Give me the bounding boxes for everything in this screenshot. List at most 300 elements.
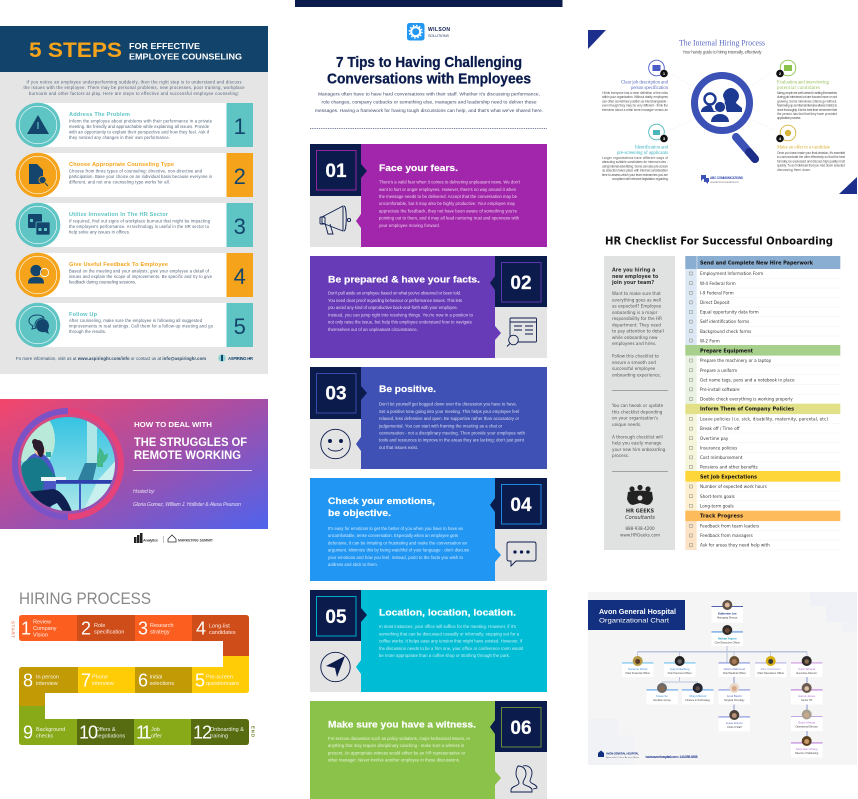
step labels: Pre-screen bbox=[206, 674, 233, 680]
node: COO bbox=[755, 656, 786, 677]
node: CMO bbox=[718, 656, 750, 677]
header banner: FOR EFFECTIVE bbox=[129, 41, 200, 51]
section: paperwork: W-2 Form bbox=[700, 338, 720, 343]
step labels: candidates bbox=[209, 630, 236, 636]
section: equipment: Prepare the machinery or a laptop bbox=[700, 358, 771, 363]
title box: Avon General Hospital bbox=[599, 609, 676, 616]
tip 01: There's a valid fear when it comes to delivering unpleasant news. We don't bbox=[379, 180, 521, 184]
section 4: make an offer: quickly. To an individual that you had down selected bbox=[777, 164, 845, 168]
node: chief of staff: Jesse Franco bbox=[726, 721, 743, 725]
node: chief services: Chief Services Officer bbox=[668, 672, 692, 675]
step labels: Company bbox=[33, 626, 57, 632]
step labels: questionnaire bbox=[206, 681, 239, 687]
step numbers: 9 bbox=[23, 722, 33, 742]
step numbers: 11 bbox=[136, 722, 152, 742]
section: job expectations: Set Job Expectations bbox=[700, 474, 757, 480]
footer: www.avonhospital.com • 143-555-5458 bbox=[644, 755, 698, 759]
tip 04: be objective. bbox=[328, 508, 391, 519]
tip 05: 05 bbox=[325, 607, 347, 628]
section 2: evaluation: Narrowing up an internal interview allows metrics to bbox=[777, 104, 837, 108]
section: policies: Break off / Time off bbox=[700, 426, 740, 431]
intro text: If you notice an employee underperforming suddenly, then the right step is to understand and discuss bbox=[27, 80, 241, 84]
sidebar: everything goes as well bbox=[612, 297, 661, 302]
tip 06: 06 bbox=[510, 718, 532, 739]
icon: document with magnifier bbox=[507, 318, 536, 346]
node: senior VP: Hanna James bbox=[798, 694, 816, 698]
section 2: evaluation: growing. Some interviews criteria go without. bbox=[777, 99, 837, 103]
node: managing director bbox=[712, 600, 743, 622]
sidebar: HR GEEKS bbox=[626, 509, 654, 515]
sidebar: department. They need bbox=[612, 322, 661, 327]
title box bbox=[588, 600, 685, 630]
node: decision group bbox=[646, 683, 678, 704]
sidebar: on your organization's bbox=[612, 416, 658, 421]
section: track progress: Ask for areas they need help with bbox=[700, 543, 770, 548]
section: track progress: Feedback from managers bbox=[700, 533, 753, 538]
section 2: evaluation: potential candidates bbox=[777, 86, 820, 91]
node: director of marketing bbox=[791, 736, 822, 758]
sidebar: successful employee bbox=[612, 366, 656, 371]
step labels: Onboarding & bbox=[210, 727, 244, 733]
tip 04: your emotions and how you feel. Instead, point to the facts you wish to bbox=[328, 555, 464, 560]
section 3: identification: Identification and bbox=[635, 146, 669, 150]
node: operational director bbox=[791, 710, 822, 731]
section: paperwork: Send and Complete New Hire Paperwork bbox=[700, 261, 814, 267]
header banner: EMPLOYEE COUNSELING bbox=[129, 52, 242, 62]
header banner bbox=[0, 26, 268, 72]
section 3: identification: pre-screening of applicants bbox=[617, 151, 668, 156]
footer: Specialist Care Across Avon bbox=[606, 756, 640, 759]
header banner: 5 STEPS bbox=[29, 39, 122, 62]
sidebar: onboarding experience. bbox=[612, 372, 661, 378]
step labels: Review bbox=[33, 620, 51, 626]
tip 06: present. An appropriate witness would either be an HR representative or bbox=[328, 750, 466, 755]
node: chief of staff: Chief of Staff bbox=[727, 726, 742, 729]
tip 04 bbox=[310, 478, 547, 581]
step numbers: 6 bbox=[138, 670, 148, 690]
section: equipment: Double check everything is working properly bbox=[700, 397, 793, 402]
step 2: different, and not one counseling type works for all. bbox=[69, 180, 170, 184]
sidebar: Want to make sure that bbox=[612, 291, 661, 296]
step 2: Choose Appropriate Counseling Type bbox=[69, 162, 174, 168]
section: track progress: Feedback from team leaders bbox=[700, 524, 759, 528]
tip 01: appreciate the feedback, they not have been aware of something you're bbox=[379, 208, 518, 213]
node: managing director: Managing Director bbox=[717, 616, 738, 620]
step labels: Offers & bbox=[96, 727, 116, 733]
section 2: evaluation: the person has lied that they have provided bbox=[777, 112, 837, 116]
sidebar: your new hire onboarding bbox=[612, 447, 666, 452]
section 1: job description: interview about a retail store manager versus an bbox=[602, 108, 668, 112]
section 4: make an offer: discussing them down. bbox=[777, 168, 811, 172]
footer contact line: Fo more information, visit us at www.aspiringhr.com/info or contact us at info@aspiringhr.com bbox=[16, 356, 206, 361]
checklist table bbox=[685, 256, 840, 550]
step numbers: 4 bbox=[196, 618, 206, 638]
tip 05: Location, location, location. bbox=[379, 608, 516, 618]
panel: hiring process bbox=[10, 589, 256, 745]
step labels: Role bbox=[94, 623, 105, 629]
node: CFO: Chief Financial Officer bbox=[625, 672, 650, 675]
section 3: identification: compliant with relevant legislation regarding bbox=[612, 177, 668, 181]
tip 03: conversation - not a disciplinary meeting. Then provide your employee with bbox=[379, 430, 526, 436]
tip 02: not only raise the issue, but help this employee understand how to navigate bbox=[328, 320, 473, 324]
intro bbox=[315, 92, 543, 114]
sidebar: www.HRGeeks.com bbox=[620, 532, 660, 537]
tip 03 bbox=[310, 367, 547, 469]
step 5: through the results. bbox=[69, 329, 106, 334]
panel: 5 steps for effective employee counseling bbox=[0, 26, 268, 374]
sidebar: while onboarding new bbox=[612, 335, 658, 340]
node: decision group: Kwasi So bbox=[656, 694, 668, 698]
sidebar: process. bbox=[612, 453, 629, 458]
section 1: job description: I think everyone has a clear definition of the roles bbox=[602, 91, 668, 95]
step 3: help solve any issues in offices. bbox=[69, 230, 130, 234]
node: executive director: Executive Director bbox=[797, 672, 817, 675]
footer logo bbox=[701, 175, 743, 184]
step 5: improvements in real settings. Call them for a follow-up meeting and go bbox=[69, 324, 214, 328]
node: CEO bbox=[712, 625, 743, 646]
tip 06: Make sure you have a witness. bbox=[328, 720, 476, 730]
footer contact line bbox=[16, 354, 253, 362]
sidebar: Are you hiring a bbox=[612, 268, 655, 274]
sidebar: Consultants bbox=[625, 515, 655, 521]
tip 02: you avoid any kind of unproductive back-and-forth with your employee. bbox=[328, 305, 458, 310]
node: chief services bbox=[664, 656, 696, 677]
node: CEO: Chief Executive Officer bbox=[715, 642, 740, 644]
tip 04: uncomfortable, tense conversation. Especially when an employee gets bbox=[328, 533, 458, 538]
step 4 bbox=[16, 253, 253, 297]
step 5: 5 bbox=[234, 314, 246, 339]
step 4: Give Useful Feedback To Employee bbox=[69, 262, 168, 268]
sidebar: responsibility for the HR bbox=[612, 316, 662, 321]
tip 02: Don't pull aside an employee based on what you've observed or been told. bbox=[328, 290, 461, 296]
step numbers: 1 bbox=[21, 618, 31, 638]
tip 05: the discussion needs to be a firm one, your office or conference room would bbox=[379, 646, 524, 651]
step 5 bbox=[16, 303, 253, 347]
section 4: make an offer bbox=[776, 125, 845, 172]
tip 06: For serious discussion such as policy violations, major behavioral issues, or bbox=[328, 736, 471, 741]
heading: THE STRUGGLES OF bbox=[134, 437, 247, 449]
section: policies: Pensions and other benefits bbox=[700, 464, 758, 470]
tip 01 bbox=[310, 144, 547, 247]
icon: megaphone bbox=[320, 206, 351, 234]
section 3: identification bbox=[602, 124, 669, 181]
step 2: 2 bbox=[234, 164, 246, 189]
step 1: they noticed any changes in their own performance. bbox=[69, 135, 170, 140]
step 1: Address The Problem bbox=[69, 112, 130, 118]
footer: AVON GENERAL HOSPITAL bbox=[606, 752, 639, 756]
icon: smiley bbox=[321, 429, 350, 459]
process path bbox=[19, 615, 249, 745]
sidebar: Follow this checklist to bbox=[612, 354, 659, 359]
sidebar: to pay attention to detail bbox=[612, 329, 664, 334]
section: equipment: Prepare a uniform bbox=[700, 368, 737, 373]
step 4: Based on the meeting and your analysis, give your employee a detail of bbox=[69, 268, 210, 274]
node: COO: Chief Operations Officer bbox=[757, 672, 784, 675]
section 1: job description: can often sometimes position as interchangeable - bbox=[602, 99, 668, 103]
node: senior VP: Senior VP bbox=[801, 699, 813, 702]
node: CFO: Suzanne Weiss bbox=[628, 667, 648, 671]
node: finance and technology bbox=[682, 683, 714, 704]
section 2: evaluation bbox=[776, 60, 837, 120]
section 4: make an offer: to communicate the offer effectively so that the best bbox=[777, 155, 845, 159]
section 2: evaluation: application process. bbox=[777, 116, 801, 120]
tip 01: uncomfortable, but it may also be highly productive. Your employee may bbox=[379, 201, 516, 206]
sidebar: join your team? bbox=[611, 280, 654, 286]
section 3: identification: as selection takes place with internal consideration bbox=[602, 169, 668, 173]
sidebar: You can tweak or update bbox=[611, 403, 664, 408]
title: 7 Tips to Having Challenging bbox=[336, 54, 522, 71]
step labels: Long-list bbox=[209, 624, 230, 630]
step 1: 1 bbox=[234, 114, 246, 139]
sidebar: A thorough checklist will bbox=[612, 434, 663, 439]
sponsor logos: Analytics bbox=[143, 538, 158, 542]
section 1: job description: Clear job description and bbox=[621, 80, 669, 86]
section 1: job description: person specification bbox=[631, 86, 669, 91]
tip 01: pointing out to them, and it may all lead nurturing trust and openness with bbox=[379, 216, 520, 221]
section 3: identification: attracting suitable candidates for internal roles - bbox=[602, 160, 668, 164]
step labels bbox=[33, 620, 244, 740]
tip 02: Instead, you can jump right into resolving things. You're now in a position to bbox=[328, 312, 474, 317]
node: decision group: Decision Group bbox=[653, 699, 671, 702]
node: CMO: Chief Medical Officer bbox=[723, 672, 746, 675]
end marker: END bbox=[250, 726, 256, 737]
step labels: offer bbox=[151, 734, 162, 740]
tip 04: address and stick to them. bbox=[328, 562, 378, 567]
sidebar: as expected? Employee bbox=[612, 304, 662, 309]
section: track progress bbox=[685, 511, 840, 550]
footer logo: www.abccommunications.com bbox=[710, 180, 739, 184]
section: policies: Inform Them of Company Policies bbox=[700, 407, 794, 413]
step labels: selections bbox=[150, 681, 174, 687]
section 2: evaluation: during job interviews but are focused more on not bbox=[777, 95, 837, 99]
step 1: meeting. Be friendly and approachable while explaining all issues. Provide bbox=[69, 124, 210, 129]
tip 03: Be positive. bbox=[379, 384, 436, 395]
step numbers: 2 bbox=[81, 618, 91, 638]
section 2: evaluation: Many people are well-versed in selling themselves bbox=[777, 91, 837, 95]
section 2: evaluation: done thoroughly. It is the best time remember that bbox=[777, 108, 837, 112]
logo: HR Geeks bbox=[627, 485, 653, 505]
title bbox=[327, 54, 531, 88]
title: HR Checklist For Successful Onboarding bbox=[605, 234, 833, 248]
node: CFO bbox=[622, 656, 654, 677]
hosts: Gloria Gomez, William J. Hollister & Alexa Pearson bbox=[133, 502, 241, 508]
step labels: negotiations bbox=[96, 734, 125, 740]
section: equipment: Pre-install software bbox=[700, 387, 740, 392]
section: policies: Insurance policies bbox=[700, 445, 737, 450]
tip 05 bbox=[310, 590, 547, 692]
section: equipment: Get name tags, pens and a notebook in place bbox=[700, 377, 795, 382]
section 4: make an offer: Once you have made your final decision, it's essential bbox=[777, 151, 845, 155]
intro text: burnouts and other factors at play. Here are steps to effective and successful employee counseling: bbox=[29, 91, 239, 96]
sidebar: new employee to bbox=[612, 274, 659, 280]
section 3: identification: using internal advertising. Some can also pre-screen bbox=[602, 164, 668, 168]
step labels: Background bbox=[36, 727, 65, 733]
logo: Wilson Solutions: SOLUTIONS bbox=[428, 33, 449, 38]
node: chief services: Judy Finkelberg bbox=[670, 667, 690, 671]
heading bbox=[134, 420, 247, 462]
section: policies: Overtime pay bbox=[700, 436, 729, 441]
tip 03: Set a positive tone going into your meeting. This helps your employee feel bbox=[379, 409, 519, 414]
tip 06: anything that may require disciplinary coaching - make sure a witness is bbox=[328, 743, 464, 748]
icon: two people bbox=[511, 766, 537, 792]
step numbers: 5 bbox=[195, 670, 205, 690]
decorative pixel corners bbox=[588, 592, 857, 765]
section 1: job description: within your organization. Without clarity, employees bbox=[602, 95, 668, 99]
tip 06: other manager. Never involve another employee in these discussions. bbox=[328, 758, 460, 762]
logo: Wilson Solutions bbox=[407, 23, 450, 40]
step labels: interview bbox=[92, 681, 114, 687]
section: track progress: Track Progress bbox=[700, 514, 743, 520]
tip 04: defensive, it can be irritating or frustrating and make the conversation an bbox=[328, 540, 468, 545]
step numbers: 8 bbox=[23, 670, 33, 690]
section: job expectations bbox=[685, 471, 840, 511]
tip 05: be more appropriate than a coffee shop or strolling through the park. bbox=[379, 653, 510, 658]
sidebar: unique needs. bbox=[612, 422, 641, 427]
tip 04: 04 bbox=[510, 495, 532, 516]
step 3: If required, find out signs of workplace burnout that might be impacting bbox=[69, 218, 211, 224]
section: job expectations: Long-term goals bbox=[700, 503, 734, 508]
step labels: checks bbox=[36, 734, 53, 740]
title: Your handy guide to hiring internally, effectively bbox=[682, 50, 762, 54]
section: equipment: Prepare Equipment bbox=[700, 348, 754, 354]
check boxes bbox=[690, 272, 692, 547]
section 4: make an offer: 4 bbox=[779, 136, 782, 141]
tip 05: something that can be discussed casually or informally, stepping out for a bbox=[379, 631, 520, 636]
step 1: with an opportunity to explain their perspective and how they feel. Ask if bbox=[69, 130, 210, 134]
step 5: After counseling, make sure the employee is following all suggested bbox=[69, 318, 203, 323]
section 3: identification: time to assess which your team researches you are bbox=[602, 173, 668, 177]
node: COO: Mike Hirshbaum bbox=[761, 667, 781, 671]
tip 02: You need clear proof regarding behaviour or performance issues. This lets bbox=[328, 298, 462, 303]
start marker: START bbox=[10, 621, 16, 638]
node: executive director: Karin Wheels bbox=[798, 667, 816, 671]
tip 05: coffee works. It helps ease any tension that might have existed. However, if bbox=[379, 638, 523, 644]
tip 02: themselves out of an unpleasant circumstance. bbox=[328, 327, 418, 332]
sidebar: ensure a smooth and bbox=[612, 360, 656, 365]
step 1: Inform the employee about problems with their performance in a private bbox=[69, 118, 213, 124]
section 3: identification: 3 bbox=[663, 136, 666, 141]
intro: messages. Having a framework for having tough discussions can help, and that's what we've shared here. bbox=[315, 108, 543, 114]
node: senior VP bbox=[791, 683, 822, 704]
step 5: Follow Up bbox=[69, 312, 98, 318]
step labels: In person bbox=[36, 674, 59, 680]
section 1: job description: 1 bbox=[663, 71, 666, 76]
sidebar: employees and hires. bbox=[612, 341, 656, 346]
step labels: Phone bbox=[92, 674, 108, 680]
section 1: job description bbox=[602, 60, 669, 112]
sidebar: 888-938-4200 bbox=[625, 526, 655, 531]
tip 03: relaxed, less defensive and open. Be supportive rather than accusatory or bbox=[379, 416, 520, 421]
sidebar bbox=[604, 256, 675, 550]
heading: REMOTE WORKING bbox=[134, 450, 241, 462]
section: paperwork: Background check forms bbox=[700, 329, 751, 334]
tip 04: Check your emotions, bbox=[328, 496, 435, 507]
node: operational director: Ryder Murray bbox=[798, 720, 816, 724]
step labels: interview bbox=[36, 681, 58, 687]
step 2: Choose from three types of counseling: directive, non-directive and bbox=[69, 168, 203, 174]
section: paperwork bbox=[685, 256, 840, 345]
tip 01: 01 bbox=[325, 161, 347, 182]
step 4: feedback during counseling sessions. bbox=[69, 280, 136, 284]
section: paperwork: Self identification forms bbox=[700, 319, 749, 324]
node: chief of staff bbox=[718, 710, 750, 732]
sidebar: this checklist depending bbox=[612, 409, 663, 414]
tip 02: Be prepared & have your facts. bbox=[328, 274, 480, 286]
tip 03: Don't let yourself get bogged down over the discussion you have to have. bbox=[379, 402, 517, 406]
step labels: Job bbox=[151, 727, 160, 733]
panel: the internal hiring process bbox=[588, 30, 857, 194]
section: paperwork: Equal opportunity data form bbox=[700, 310, 759, 315]
section 3: identification: Larger organizations have different ways of bbox=[602, 156, 668, 160]
node: surgical oncology: Surgical Oncology bbox=[724, 699, 745, 702]
section: policies: Cost reimbursement bbox=[700, 455, 743, 460]
step labels: Vision bbox=[33, 632, 48, 638]
sponsor logos: MARKETING SUMMIT bbox=[178, 538, 214, 542]
title: The Internal Hiring Process bbox=[679, 38, 765, 48]
step 3: Utilize Innovation In The HR Sector bbox=[69, 212, 169, 218]
title: Conversations with Employees bbox=[327, 70, 531, 88]
connectors bbox=[638, 631, 807, 686]
tip 06 bbox=[310, 701, 547, 799]
step numbers bbox=[21, 618, 212, 742]
node: director of marketing: Sara Jean Chang bbox=[796, 747, 818, 751]
step labels: strategy bbox=[150, 630, 170, 636]
tip 05: In most instances, your office will suffice for the meeting. However, if it's bbox=[379, 624, 516, 629]
node: executive director bbox=[791, 656, 822, 677]
node: director of marketing: Director of Marketing bbox=[795, 752, 819, 755]
panel: 7 tips challenging conversations bbox=[295, 0, 562, 799]
section 4: make an offer: Make an offer to a candidate bbox=[777, 146, 830, 150]
title box: Organizational Chart bbox=[599, 618, 669, 624]
section: equipment bbox=[685, 345, 840, 404]
sidebar: onboarding is a major bbox=[612, 310, 658, 315]
tip 01: your employee moving forward. bbox=[379, 223, 440, 228]
sidebar: help you easily manage bbox=[612, 441, 662, 446]
magnifier with people icons bbox=[694, 76, 755, 159]
step labels: Research bbox=[150, 623, 174, 629]
heading: HOW TO DEAL WITH bbox=[134, 420, 212, 429]
intro: Managers often have to have hard conversations with their staff. Whether it's discussing performance, bbox=[318, 92, 540, 98]
tip 02: 02 bbox=[510, 273, 532, 294]
org nodes bbox=[622, 600, 822, 758]
section: paperwork: Direct Deposit bbox=[700, 300, 730, 305]
step 4: 4 bbox=[234, 264, 246, 289]
section: job expectations: Short-term goals bbox=[700, 494, 735, 499]
section 2: evaluation: Evaluation and interviewing bbox=[777, 80, 830, 86]
hosts bbox=[133, 489, 241, 508]
node: CEO: Mohan Anjum bbox=[718, 636, 737, 640]
section 4: make an offer: formally, be expressed and discuss high quality most bbox=[777, 159, 845, 163]
panel: Avon General Hospital org chart bbox=[588, 592, 857, 765]
intro: role changes, company cutbacks or something else, managers and leadership need to deliver these bbox=[322, 100, 537, 106]
icon: compass arrow bbox=[321, 652, 350, 682]
step 3: the employee's performance. AI technology is useful in the HR sector to bbox=[69, 224, 210, 229]
title bbox=[679, 38, 765, 54]
node: managing director: Katherine Lee bbox=[718, 612, 737, 616]
tip 01: the message needs to be delivered. Accept that the conversation may be bbox=[379, 194, 518, 199]
step numbers: 3 bbox=[138, 618, 148, 638]
step labels: specification bbox=[94, 630, 124, 636]
step 3: 3 bbox=[234, 214, 246, 239]
section: paperwork: I-9 Federal Form bbox=[700, 290, 734, 295]
step 2 bbox=[16, 153, 253, 197]
title: HIRING PROCESS bbox=[19, 589, 151, 608]
node: operational director: Operational Director bbox=[796, 726, 818, 728]
hosts: Hosted by: bbox=[133, 489, 156, 495]
node: surgical oncology bbox=[718, 683, 750, 704]
section: paperwork: W-4 Federal form bbox=[700, 281, 736, 286]
logo: Wilson Solutions: WILSON bbox=[428, 27, 450, 33]
